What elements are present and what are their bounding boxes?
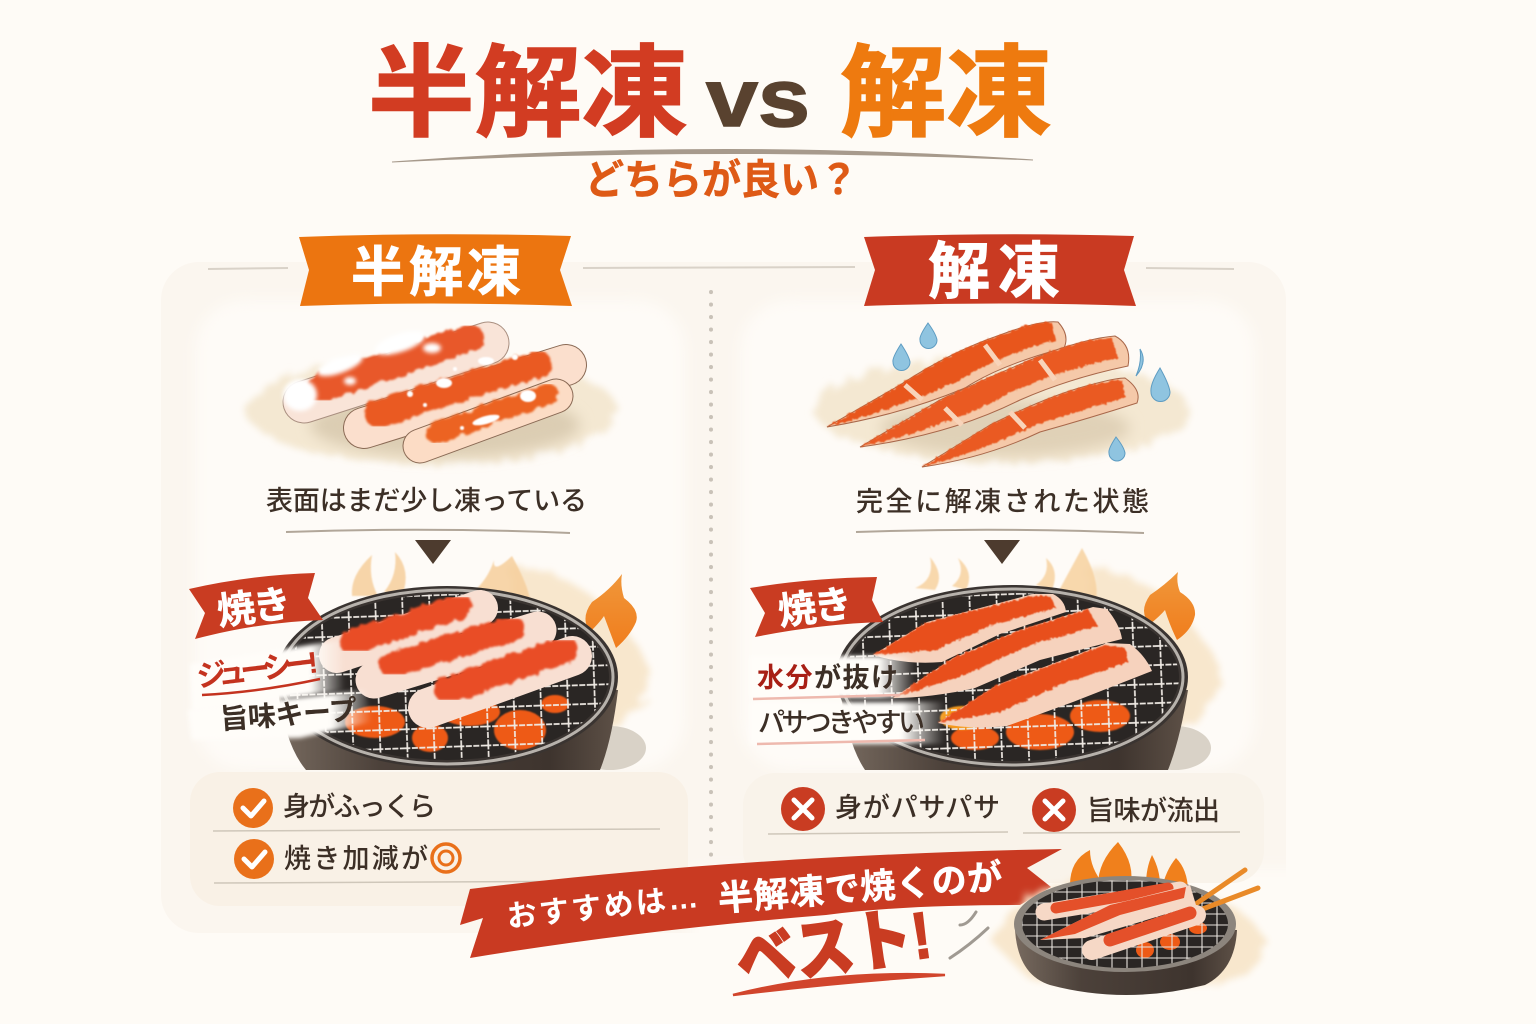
grill top [836, 585, 1188, 769]
demerit 2: 旨味が流出 [1087, 796, 1220, 826]
illustration: left grill [276, 552, 648, 770]
callout: juicy [188, 640, 372, 740]
merit 2 [234, 839, 460, 879]
conclusion ribbon: 半解凍で焼くのが [717, 858, 1004, 919]
callout: moisture lost: 水分が抜け [757, 662, 898, 693]
merit 1 [233, 788, 436, 828]
caption: thawed state: 完全に解凍された状態 [856, 487, 1149, 517]
segment bands [905, 345, 1055, 428]
grill body [1015, 930, 1237, 995]
crab legs [1040, 885, 1196, 950]
heading ribbon: thawed [864, 234, 1136, 307]
ribbon: grilled, right [750, 577, 883, 637]
panel: merits [190, 772, 688, 906]
demerit 1: 身がパサパサ [835, 793, 1000, 823]
grill body [840, 690, 1188, 770]
heading ribbon: half thawed: 半解凍 [351, 243, 521, 303]
grill top [276, 586, 618, 768]
crab legs on grill [873, 594, 1152, 727]
arrow: right down [984, 540, 1020, 564]
grill body [278, 690, 618, 770]
center dotted divider [709, 292, 713, 856]
chopsticks [1190, 870, 1258, 910]
subtitle: どちらが良い？ [585, 157, 858, 203]
caption underlines [286, 530, 1144, 533]
best message: ベスト! [732, 897, 936, 998]
icon: flames [1070, 842, 1188, 892]
ribbon: grilled, left [189, 573, 323, 639]
demerit 2 [1032, 788, 1220, 832]
panel: demerits [743, 773, 1264, 883]
illustration: right grill [836, 548, 1219, 770]
illustration: half-thawed crab legs [246, 326, 618, 464]
icon: flame [585, 574, 637, 648]
icon: water drops [893, 323, 1170, 461]
callout: juicy: ジューシー! [195, 646, 320, 694]
crab legs on grill [337, 606, 572, 708]
title: half thawed: 半解凍 [368, 38, 688, 150]
demerit 1 [781, 787, 1000, 831]
callout: moisture lost [750, 656, 945, 744]
icon: faded flames [915, 548, 1097, 600]
conclusion ribbon: おすすめは… [505, 881, 700, 934]
title [368, 38, 1052, 150]
heading ribbon: thawed: 解凍 [928, 238, 1060, 307]
merit 1: 身がふっくら [283, 792, 436, 822]
heading ribbon: half thawed [299, 234, 572, 306]
ribbon: grilled, right: 焼き [776, 583, 855, 634]
title: thawed: 解凍 [840, 38, 1052, 150]
callout: moisture lost: パサつきやすい [758, 708, 925, 738]
panel header rules [208, 267, 1234, 269]
title underline [392, 149, 1033, 162]
title: vs: vs [706, 53, 810, 144]
caption: half thawed state: 表面はまだ少し凍っている [266, 486, 587, 516]
icon: faded flames [352, 552, 530, 600]
illustration: fully thawed crab legs [814, 322, 1190, 467]
arrow: left down [415, 540, 451, 564]
conclusion ribbon [460, 849, 1062, 958]
icon: flame [1144, 572, 1195, 640]
merit 2: 焼き加減が [284, 844, 428, 874]
panel: comparison background [161, 262, 1330, 958]
callout: juicy: 旨味キープ [219, 695, 358, 735]
ribbon: grilled, left: 焼き [215, 583, 294, 634]
illustration: recommended small grill [990, 842, 1268, 995]
